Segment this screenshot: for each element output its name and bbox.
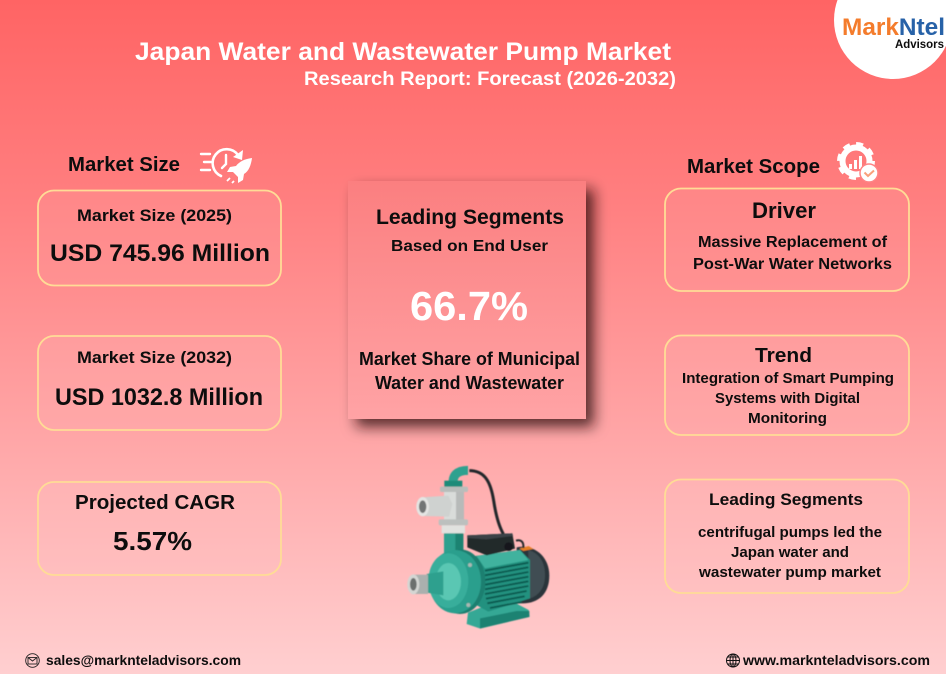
panel: leading segments center: Leading Segments [376,206,564,229]
panel: trend: Monitoring [748,410,827,427]
title: Japan Water and Wastewater Pump Market [135,38,672,66]
panel: market size 2025: USD 745.96 Million [50,240,270,267]
panel: trend: Integration of Smart Pumping [682,370,894,387]
panel: leading segments center: Based on End User [391,238,548,255]
logo: MarkNtel [842,14,945,41]
panel: market size 2025 [38,190,281,286]
footer: website: www.marknteladvisors.com [742,652,930,668]
panel: leading segments center: Market Share of Municipal [359,349,580,369]
panel: leading segments right: centrifugal pumps led the [698,524,882,541]
logo: Advisors [895,37,944,51]
panel: market size 2032 [38,336,281,430]
logo [834,0,946,79]
panel: market size 2025: Market Size (2025) [77,206,232,225]
panel: trend [665,336,909,435]
junction box [467,533,515,555]
title: Research Report: Forecast (2026-2032) [304,69,676,90]
base [467,603,530,629]
panel: driver [665,188,909,291]
panel: projected CAGR: Projected CAGR [75,492,236,514]
illustration: water pump [407,470,549,629]
icon: clock and rocket [201,149,252,183]
panel: trend: Systems with Digital [715,390,860,407]
panel: leading segments center: 66.7% [410,283,528,329]
icon: gear with chart and check [839,144,878,182]
title [135,38,676,90]
panel: leading segments right: Japan water and [731,544,849,561]
pipes and outlets [413,575,428,594]
panel: leading segments center [348,181,586,419]
panel: driver: Driver [752,198,816,223]
panel: projected CAGR [38,482,281,575]
panel: projected CAGR: 5.57% [113,526,192,556]
volute [435,549,485,614]
panel: market size 2032: Market Size (2032) [77,348,232,367]
panel: driver: Post-War Water Networks [693,256,892,273]
panel: market size 2032: USD 1032.8 Million [55,384,263,411]
panel: leading segments right [665,480,909,593]
heading: market size: Market Size [68,154,180,176]
heading: market scope: Market Scope [687,156,820,178]
icon: globe [726,654,740,667]
panel: trend: Trend [755,345,812,367]
footer: email: sales@marknteladvisors.com [46,652,241,668]
panel: leading segments center: Water and Wastewater [375,373,564,393]
panel: leading segments right: Leading Segments [709,490,863,509]
motor body [473,550,530,612]
panel: driver: Massive Replacement of [698,234,888,251]
motor end cap [517,547,549,603]
panel: leading segments right: wastewater pump market [698,564,881,581]
icon: email [26,654,39,667]
